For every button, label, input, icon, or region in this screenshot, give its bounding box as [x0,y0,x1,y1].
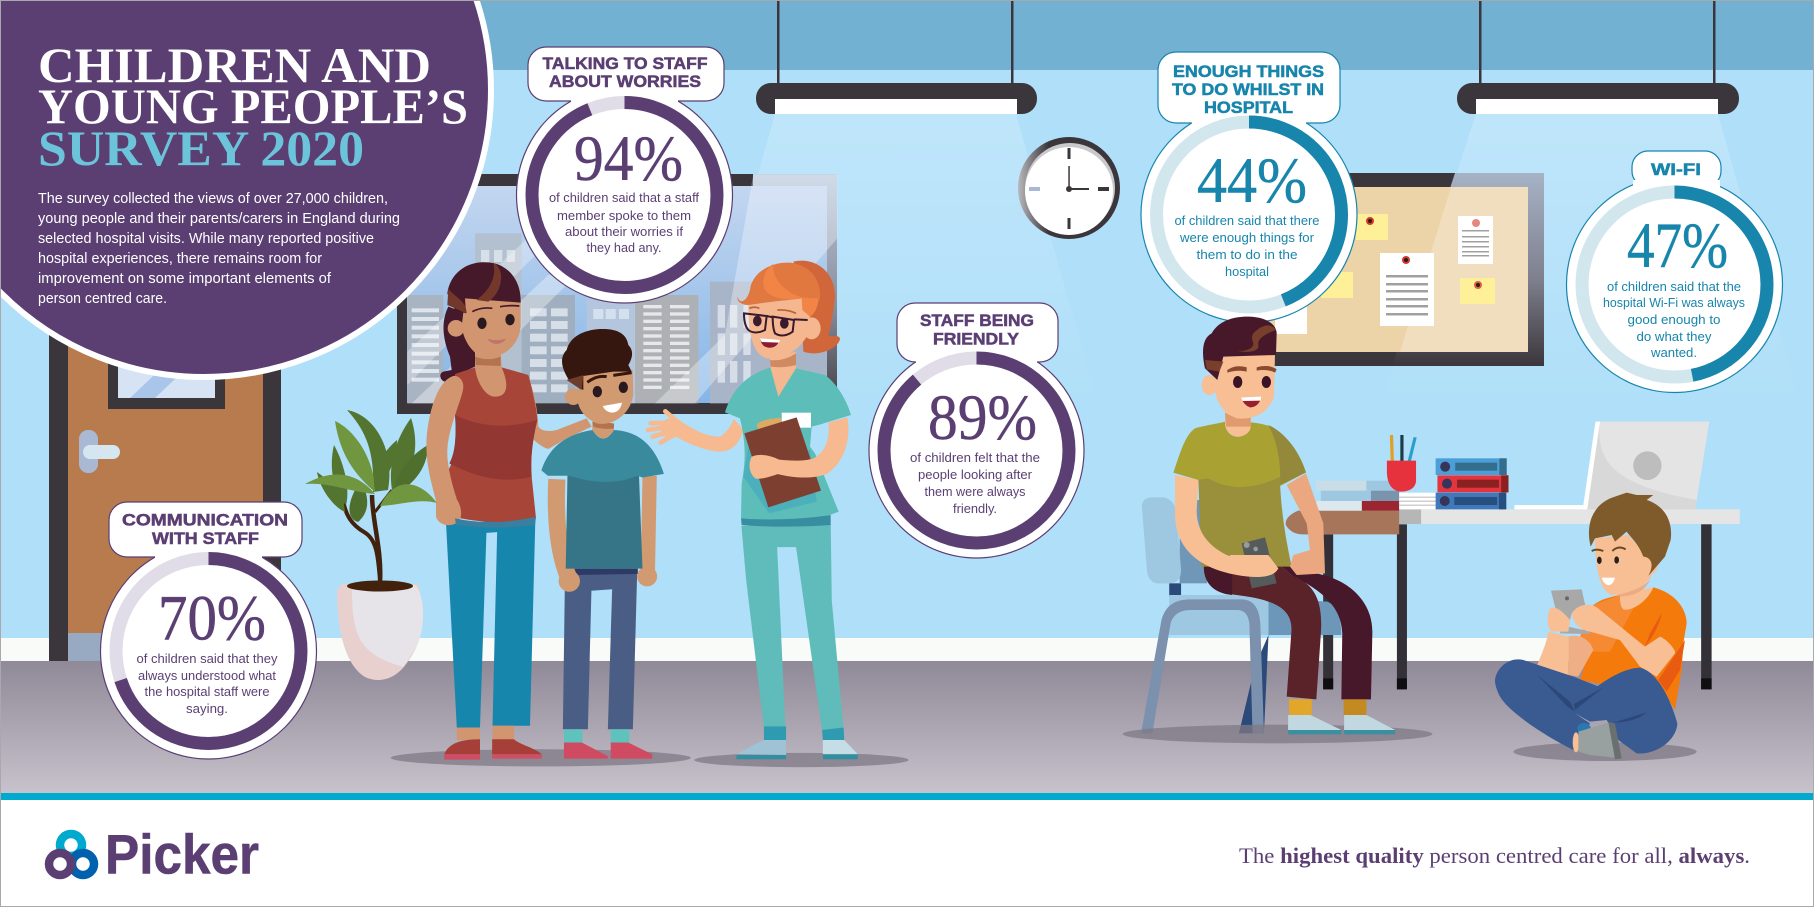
stat: wi-fi 47%: WI-FI [1651,160,1701,179]
stat: wi-fi 47%: of children said that the [1607,279,1741,294]
stat: enough things to do 44%: 44% [1197,145,1307,217]
character: nurse [648,261,909,767]
stat: communication with staff 70%: of children said that they [136,651,278,666]
stat: wi-fi 47%: 47% [1627,210,1728,282]
stat: talking to staff about worries 94%: they had any. [586,240,662,255]
ceiling light right [1457,0,1739,114]
stat: enough things to do 44%: were enough things for [1179,230,1315,245]
stat: enough things to do 44%: hospital [1225,264,1269,279]
stat: staff being friendly 89%: FRIENDLY [933,330,1020,349]
stat: wi-fi 47% [1566,151,1782,392]
stat: communication with staff 70%: WITH STAFF [152,529,259,548]
stat: enough things to do 44%: them to do in the [1196,247,1298,262]
footer [49,822,1750,886]
stat: enough things to do 44%: TO DO WHILST IN [1172,80,1324,99]
stat: communication with staff 70%: the hospital staff were [144,684,270,699]
stat: communication with staff 70%: always understood what [138,668,276,683]
panel: intro circle [0,0,491,377]
intro text: young people and their parents/carers in England during [38,210,400,227]
stat: staff being friendly 89%: people looking after [918,467,1033,482]
stat: enough things to do 44%: HOSPITAL [1204,98,1293,117]
intro text: The survey collected the views of over 27,000 children, [38,190,388,207]
intro text: person centred care. [38,290,167,307]
ceiling light left [756,0,1037,114]
light beams [688,114,1805,422]
tagline: The highest quality person centred care for all, always. [1239,843,1750,868]
stat: enough things to do 44%: of children said that there [1174,213,1320,228]
intro text: selected hospital visits. While many reported positive [38,230,374,247]
character: boy standing [541,329,664,759]
notice board [1250,173,1544,366]
character: man sitting with phone [1123,317,1432,743]
stat: talking to staff about worries 94%: TALKING TO STAFF [542,54,708,73]
stat: communication with staff 70%: COMMUNICATION [122,510,288,530]
stat: wi-fi 47%: do what they [1636,329,1712,344]
stat: staff being friendly 89%: friendly. [953,501,997,516]
window with city view [397,174,837,414]
title [38,37,468,176]
intro text: hospital experiences, there remains room for [38,250,322,267]
icon: Picker logo rings [49,834,94,875]
stat: communication with staff 70% [100,502,316,759]
stat: staff being friendly 89%: of children felt that the [910,450,1040,465]
chair, desk and items [1141,422,1740,733]
intro text: improvement on some important elements of [38,270,332,287]
stat: wi-fi 47%: good enough to [1628,312,1720,327]
door [49,330,281,661]
title: SURVEY 2020 [38,120,364,176]
stat: staff being friendly 89% [869,303,1084,558]
stat: wi-fi 47%: wanted. [1650,345,1697,360]
stat: talking to staff about worries 94%: 94% [574,123,683,195]
stat: enough things to do 44% [1141,52,1357,322]
icon: wall clock [1018,137,1120,239]
stat: communication with staff 70%: 70% [158,582,266,654]
character: boy on floor with tablet [1495,493,1697,761]
stat: wi-fi 47%: hospital Wi-Fi was always [1603,295,1745,310]
stat: staff being friendly 89%: them were always [924,484,1026,499]
stat: staff being friendly 89%: STAFF BEING [920,311,1034,330]
title: YOUNG PEOPLE’S [38,78,468,134]
stat: talking to staff about worries 94%: ABOUT WORRIES [549,72,701,91]
character: mother [391,262,691,766]
stat: talking to staff about worries 94%: member spoke to them [557,208,691,223]
stat: talking to staff about worries 94%: of children said that a staff [549,190,699,205]
stat: enough things to do 44%: ENOUGH THINGS [1173,62,1324,81]
logo wordmark: Picker [105,822,259,886]
stat: talking to staff about worries 94%: about their worries if [565,224,683,239]
stat: staff being friendly 89%: 89% [928,382,1037,454]
intro text [38,190,400,307]
stat: communication with staff 70%: saying. [186,701,228,716]
icon: potted plant [305,410,437,680]
stat: talking to staff about worries 94% [516,47,732,303]
title: CHILDREN AND [38,37,431,93]
